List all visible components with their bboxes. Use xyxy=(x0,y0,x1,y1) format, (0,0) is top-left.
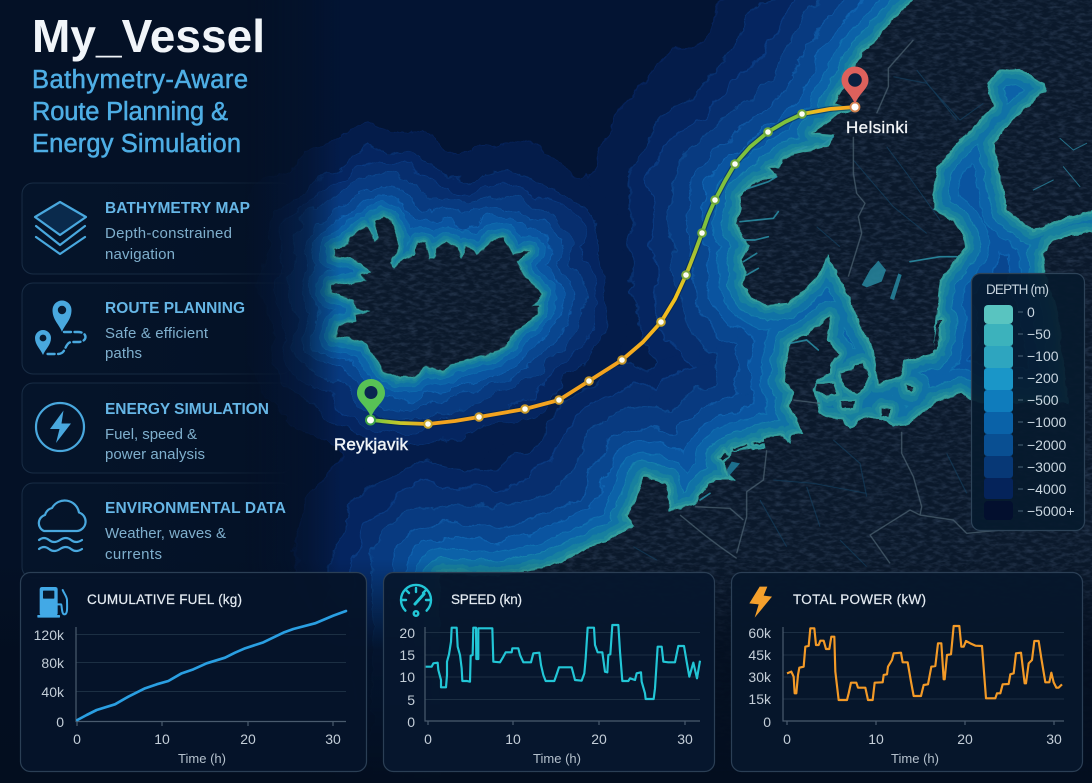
card description xyxy=(105,426,205,463)
line chart: power: 15k xyxy=(748,691,772,707)
label: Helsinki: Helsinki xyxy=(846,118,908,137)
icon: fuel pump xyxy=(37,587,67,618)
subtitle xyxy=(32,66,248,158)
line chart: power: 30 xyxy=(1046,731,1062,747)
line chart: fuel: 20 xyxy=(240,731,256,747)
legend: depth xyxy=(972,274,1084,530)
subtitle: Route Planning & xyxy=(32,98,228,126)
line chart: speed: 5 xyxy=(407,692,415,708)
legend labels: −50 xyxy=(1027,326,1051,342)
legend labels: −3000 xyxy=(1027,459,1067,475)
card description: Depth-constrained xyxy=(105,225,232,242)
line chart: power: 30k xyxy=(748,669,772,685)
title: My_Vessel xyxy=(32,10,265,62)
panel heading: CUMULATIVE FUEL (kg) xyxy=(87,592,242,607)
line chart: power: Time (h) xyxy=(891,751,939,766)
line chart: fuel: Time (h) xyxy=(178,751,226,766)
line chart: power: 0 xyxy=(783,731,791,747)
legend labels: −200 xyxy=(1027,370,1059,386)
card heading: ROUTE PLANNING xyxy=(105,300,245,317)
card heading: BATHYMETRY MAP xyxy=(105,200,250,217)
panel heading: TOTAL POWER (kW) xyxy=(793,592,926,607)
pin: Helsinki xyxy=(842,66,868,112)
panel: speed xyxy=(384,572,714,772)
line chart: power: 45k xyxy=(748,647,772,663)
shallow shelf contours xyxy=(332,0,1092,783)
panel heading: SPEED (kn) xyxy=(451,592,522,607)
legend labels: −2000 xyxy=(1027,437,1067,453)
legend labels: −5000+ xyxy=(1027,503,1074,519)
card heading: ENERGY SIMULATION xyxy=(105,401,269,418)
bottom band fade xyxy=(0,560,1092,783)
panel: total power xyxy=(732,572,1082,772)
line chart: speed: 20 xyxy=(399,625,415,641)
label: Reykjavik: Reykjavik xyxy=(334,435,408,454)
fjords, lakes and rivers xyxy=(700,137,1087,500)
legend labels xyxy=(1027,304,1074,519)
line chart: speed: 0 xyxy=(407,714,415,730)
icon: power bolt xyxy=(749,587,772,618)
line chart: fuel: 0 xyxy=(56,714,64,730)
line chart: speed: 15 xyxy=(399,647,415,663)
line chart: power: 20 xyxy=(957,731,973,747)
icon: energy bolt xyxy=(36,403,84,451)
card description: navigation xyxy=(105,246,175,263)
route waypoints xyxy=(424,110,806,428)
line chart: power: 0 xyxy=(763,714,771,730)
card: bathymetry map xyxy=(22,183,292,274)
legend labels: −500 xyxy=(1027,392,1059,408)
card description: Safe & efficient xyxy=(105,325,209,342)
line chart: fuel xyxy=(34,611,346,766)
deep ocean contours xyxy=(332,0,1092,783)
card description: power analysis xyxy=(105,446,205,463)
country borders xyxy=(680,40,1000,563)
line chart: speed: Time (h) xyxy=(533,751,581,766)
icon: layers xyxy=(35,202,86,254)
route line xyxy=(371,107,855,424)
mid-depth contours xyxy=(332,0,1092,783)
rivers xyxy=(633,70,983,567)
line chart: power xyxy=(748,625,1064,766)
line chart: speed xyxy=(399,625,700,766)
line chart: power: 10 xyxy=(868,731,884,747)
card description: paths xyxy=(105,345,142,362)
map: bathymetry xyxy=(332,0,1092,783)
panel: cumulative fuel xyxy=(20,572,366,772)
line chart: speed: 10 xyxy=(505,731,521,747)
land masses xyxy=(332,0,1092,783)
card description xyxy=(105,325,209,362)
card description: Fuel, speed & xyxy=(105,426,197,443)
icon: cloud and waves xyxy=(39,500,86,551)
legend labels: −1000 xyxy=(1027,414,1067,430)
card: environmental data xyxy=(22,483,292,578)
line chart: fuel: 0 xyxy=(73,731,81,747)
icon: route pins xyxy=(35,300,86,355)
line chart: fuel: 10 xyxy=(154,731,170,747)
legend swatches xyxy=(984,305,1013,520)
card description: Weather, waves & xyxy=(105,525,226,542)
line chart: fuel: 40k xyxy=(41,684,65,700)
subtitle: Energy Simulation xyxy=(32,130,241,158)
line chart: fuel: 80k xyxy=(41,655,65,671)
left column fade xyxy=(0,0,340,783)
line chart: fuel: 30 xyxy=(325,731,341,747)
line chart: speed: 10 xyxy=(399,669,415,685)
line chart: fuel: 120k xyxy=(34,627,65,643)
pin: Reykjavik xyxy=(357,379,385,424)
legend labels: 0 xyxy=(1027,304,1035,320)
line chart: speed: 30 xyxy=(677,731,693,747)
card description xyxy=(105,225,232,263)
legend heading: DEPTH (m) xyxy=(986,282,1049,297)
card: energy simulation xyxy=(22,383,292,473)
card heading: ENVIRONMENTAL DATA xyxy=(105,500,286,517)
legend ticks xyxy=(1018,312,1023,511)
line chart: speed: 20 xyxy=(591,731,607,747)
subtitle: Bathymetry-Aware xyxy=(32,66,248,94)
line chart: speed: 0 xyxy=(424,731,432,747)
card description xyxy=(105,525,226,563)
card description: currents xyxy=(105,546,162,563)
line chart: power: 60k xyxy=(748,625,772,641)
card: route planning xyxy=(22,283,292,374)
legend labels: −100 xyxy=(1027,348,1059,364)
legend labels: −4000 xyxy=(1027,481,1067,497)
icon: gauge xyxy=(401,585,431,616)
